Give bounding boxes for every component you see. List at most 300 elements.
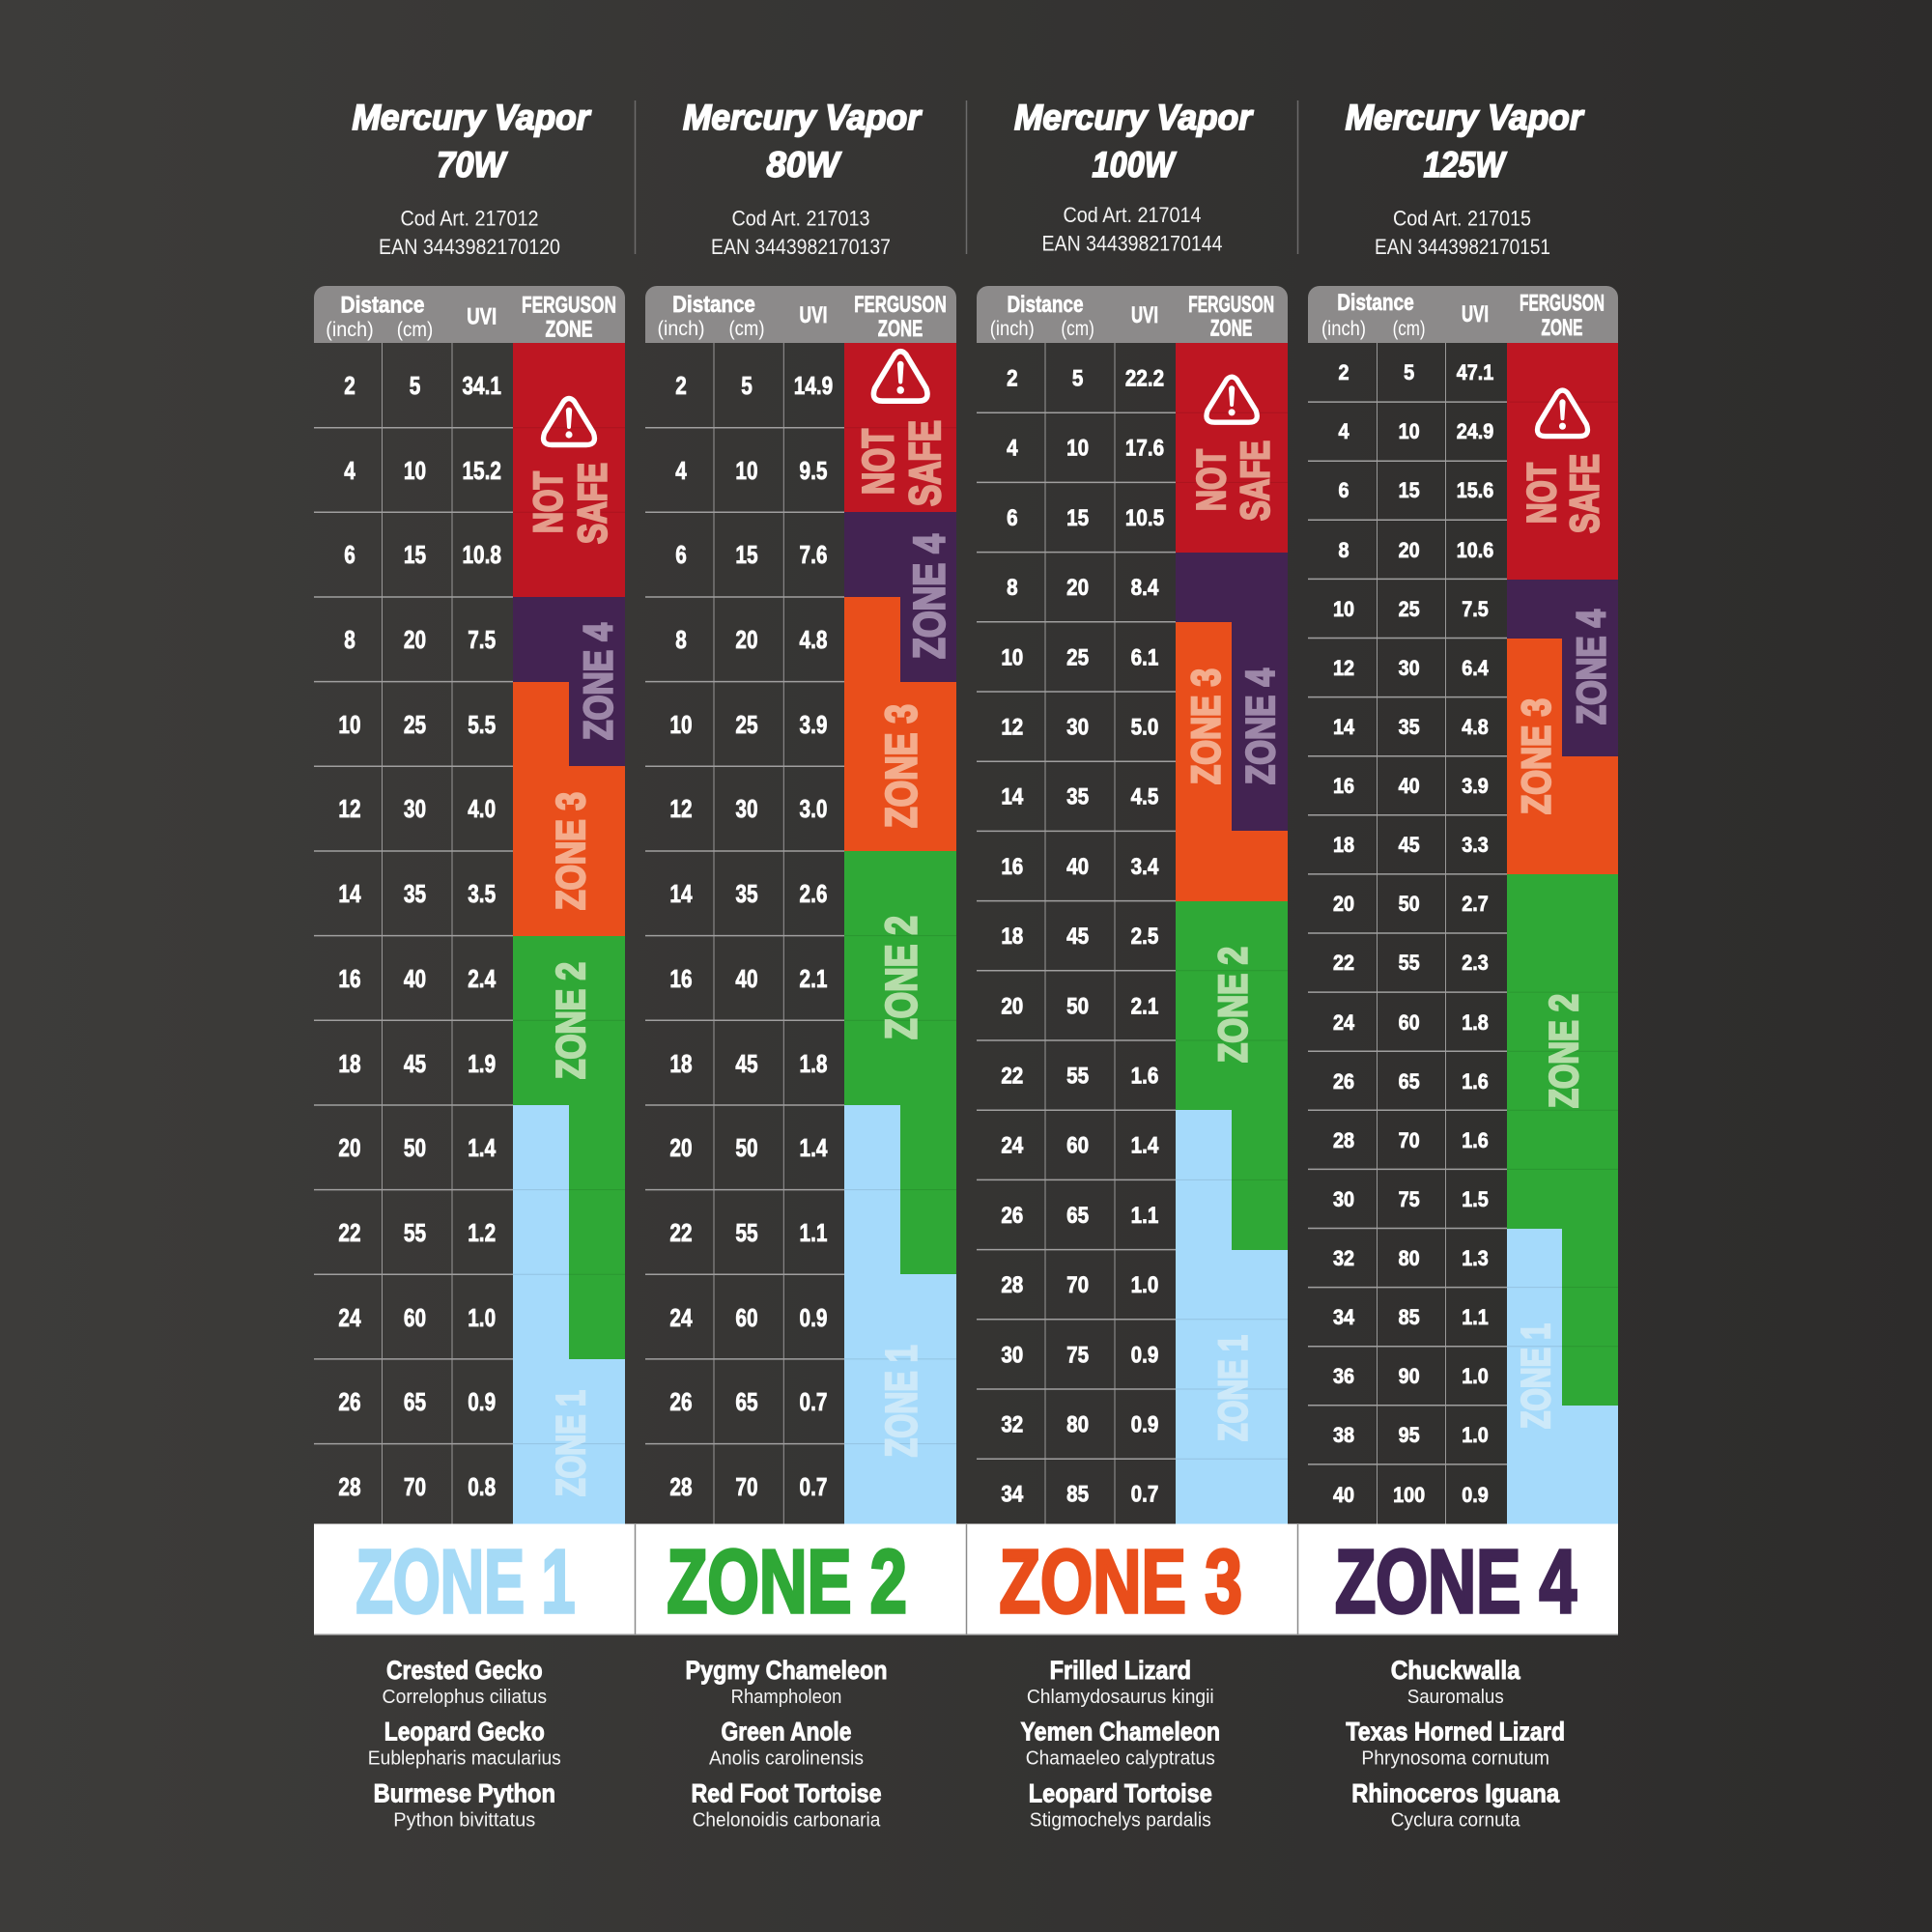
ferguson zones 125W: SAFE	[1562, 454, 1607, 533]
species list zone 2: Anolis carolinensis	[709, 1747, 864, 1770]
cm column 70W: 5	[410, 372, 420, 400]
cm column 100W: 15	[1066, 504, 1089, 530]
cm column 125W: 50	[1399, 893, 1420, 916]
UVI column 70W	[462, 372, 501, 1501]
cm column 100W: 35	[1066, 783, 1089, 810]
ferguson zones 70W	[513, 343, 625, 1524]
cm column 80W: 30	[735, 795, 758, 823]
cm column 70W: 60	[404, 1304, 426, 1332]
UVI column 125W: 15.6	[1457, 479, 1493, 502]
UVI column 80W: 14.9	[794, 372, 833, 400]
inch column 70W: 10	[338, 711, 361, 739]
ferguson zones 125W	[1507, 343, 1618, 1524]
cm column 70W: 10	[404, 457, 426, 485]
cm column 70W: 55	[404, 1219, 426, 1247]
banner label: zone 1: ZONE 1	[355, 1531, 576, 1632]
UVI column 100W: 5.0	[1131, 714, 1158, 740]
panel: table 80W	[645, 286, 956, 1524]
UVI column 80W: 7.6	[800, 541, 827, 569]
lamp heading: Mercury Vapor 80W	[683, 98, 923, 259]
cm column 80W	[735, 372, 758, 1501]
cm column 100W: 45	[1066, 923, 1089, 949]
inch column 80W: 28	[669, 1473, 693, 1501]
inch column 70W	[338, 372, 361, 1501]
ferguson zones 125W: NOT	[1519, 463, 1564, 524]
UVI column 125W: 2.3	[1462, 952, 1489, 975]
table header 80W: UVI	[800, 302, 827, 328]
cm column 125W: 100	[1393, 1484, 1425, 1507]
ferguson zones 100W	[1176, 343, 1288, 1524]
inch column 100W: 4	[1007, 435, 1018, 461]
UVI column 100W: 0.7	[1131, 1481, 1158, 1507]
lamp heading: Mercury Vapor 125W: 125W	[1424, 145, 1507, 185]
species list zone 1: Crested Gecko	[386, 1656, 543, 1685]
table header 70W: ZONE	[545, 317, 593, 342]
lamp heading: Mercury Vapor 100W: Cod Art. 217014	[1063, 203, 1202, 227]
cm column 70W: 40	[404, 965, 426, 993]
cm column 80W: 35	[735, 880, 758, 908]
table header 100W: (cm)	[1061, 318, 1094, 340]
UVI column 125W: 1.1	[1462, 1306, 1489, 1329]
species list zone 4: Phrynosoma cornutum	[1361, 1747, 1549, 1770]
UVI column 125W: 1.5	[1462, 1188, 1489, 1211]
cm column 80W: 65	[735, 1388, 758, 1416]
table header 70W: (cm)	[397, 319, 433, 341]
inch column 100W: 2	[1007, 365, 1018, 391]
inch column 125W: 20	[1333, 893, 1354, 916]
inch column 70W: 28	[338, 1473, 361, 1501]
lamp heading: Mercury Vapor 70W: 70W	[437, 145, 508, 185]
species list zone 2: Rhampholeon	[731, 1686, 841, 1708]
species list zone 1: Eublepharis macularius	[368, 1747, 561, 1770]
species list zone 3: Leopard Tortoise	[1029, 1779, 1212, 1808]
inch column 70W: 18	[338, 1050, 361, 1078]
icon: warning triangle 70W	[544, 398, 594, 444]
table header 125W: (inch)	[1321, 318, 1366, 340]
table header 80W: ZONE	[878, 316, 923, 342]
inch column 125W: 26	[1333, 1070, 1354, 1094]
cm column 80W: 60	[735, 1304, 758, 1332]
cm column 100W: 40	[1066, 853, 1089, 879]
species list zone 1: Correlophus ciliatus	[383, 1686, 547, 1708]
cm column 80W: 20	[735, 626, 758, 654]
table header 80W	[645, 286, 956, 343]
inch column 80W	[669, 372, 693, 1501]
lamp heading: Mercury Vapor 125W: EAN 3443982170151	[1375, 235, 1550, 259]
cm column 100W: 65	[1066, 1202, 1089, 1228]
UVI column 70W: 3.5	[468, 880, 496, 908]
ferguson zones 80W: SAFE	[900, 420, 950, 506]
ferguson zones 80W: ZONE 3	[876, 704, 925, 828]
inch column 70W: 14	[338, 880, 361, 908]
species list zone 4	[1346, 1656, 1565, 1832]
UVI column 125W: 6.4	[1462, 657, 1489, 680]
inch column 125W: 22	[1333, 952, 1354, 975]
table header 125W: (cm)	[1393, 318, 1426, 340]
UVI column 70W: 0.9	[468, 1388, 496, 1416]
inch column 100W: 22	[1001, 1063, 1023, 1089]
inch column 100W: 16	[1001, 853, 1023, 879]
cm column 70W: 15	[404, 541, 426, 569]
inch column 100W: 28	[1001, 1272, 1023, 1297]
UVI column 80W	[794, 372, 833, 1501]
cm column 125W: 90	[1399, 1365, 1420, 1388]
cm column 80W: 45	[735, 1050, 758, 1078]
cm column 125W: 45	[1399, 834, 1420, 857]
table header 70W: Distance	[340, 292, 425, 319]
species list zone 4: Cyclura cornuta	[1391, 1809, 1520, 1832]
cm column 80W: 55	[735, 1219, 758, 1247]
inch column 100W: 34	[1001, 1481, 1024, 1507]
cm column 80W: 70	[735, 1473, 758, 1501]
cm column 125W	[1393, 361, 1425, 1507]
UVI column 125W: 1.0	[1462, 1424, 1489, 1447]
lamp heading: Mercury Vapor 80W: 80W	[767, 145, 842, 185]
UVI column 125W: 1.6	[1462, 1129, 1489, 1152]
cm column 125W: 20	[1399, 539, 1420, 562]
inch column 70W: 2	[344, 372, 355, 400]
inch column 125W	[1333, 361, 1354, 1507]
ferguson zones 80W: ZONE 1	[876, 1345, 925, 1457]
UVI column 80W: 0.7	[800, 1388, 827, 1416]
inch column 100W: 8	[1007, 575, 1018, 600]
UVI column 70W: 2.4	[468, 965, 496, 993]
lamp heading: Mercury Vapor 70W: Cod Art. 217012	[400, 207, 539, 231]
UVI column 100W: 8.4	[1131, 575, 1159, 600]
UVI column 125W	[1457, 361, 1494, 1507]
table header 125W	[1308, 286, 1618, 343]
ferguson zones 80W: ZONE 2	[876, 916, 925, 1039]
ferguson zones 100W: ZONE 2	[1210, 947, 1256, 1063]
cm column 125W: 30	[1399, 657, 1420, 680]
ferguson zones 125W: ZONE 4	[1568, 610, 1613, 724]
table header 80W: (inch)	[657, 318, 705, 340]
ferguson zones 125W: ZONE 3	[1514, 698, 1559, 814]
inch column 125W: 24	[1333, 1011, 1354, 1035]
inch column 125W: 34	[1333, 1306, 1354, 1329]
UVI column 70W: 4.0	[468, 795, 496, 823]
table header 100W: (inch)	[990, 318, 1035, 340]
inch column 125W: 38	[1333, 1424, 1354, 1447]
UVI column 80W: 3.0	[800, 795, 827, 823]
table header 100W: FERGUSON	[1188, 292, 1274, 318]
table header 100W	[977, 286, 1288, 343]
lamp heading: Mercury Vapor 100W: 100W	[1092, 145, 1177, 185]
UVI column 80W: 9.5	[800, 457, 827, 485]
lamp heading: Mercury Vapor 80W: EAN 3443982170137	[711, 235, 891, 259]
UVI column 125W: 3.9	[1462, 775, 1489, 798]
grid lines 100W	[977, 343, 1176, 1524]
cm column 70W	[404, 372, 426, 1501]
species list zone 1: Leopard Gecko	[384, 1718, 545, 1747]
cm column 100W: 55	[1066, 1063, 1089, 1089]
table header 125W: FERGUSON	[1520, 290, 1605, 317]
UVI column 100W: 1.1	[1131, 1202, 1158, 1228]
UVI column 125W: 1.6	[1462, 1070, 1489, 1094]
cm column 125W: 5	[1404, 361, 1414, 384]
cm column 100W: 75	[1066, 1342, 1089, 1368]
cm column 70W: 20	[404, 626, 426, 654]
inch column 70W: 24	[338, 1304, 361, 1332]
inch column 80W: 8	[675, 626, 687, 654]
cm column 100W: 5	[1072, 365, 1083, 391]
inch column 80W: 6	[675, 541, 687, 569]
UVI column 100W: 6.1	[1131, 644, 1158, 670]
cm column 125W: 55	[1399, 952, 1420, 975]
UVI column 70W: 1.4	[468, 1134, 496, 1162]
lamp heading: Mercury Vapor 80W: Mercury Vapor	[683, 98, 923, 137]
banner label: zone 2: ZONE 2	[667, 1531, 907, 1632]
cm column 125W: 35	[1399, 716, 1420, 739]
UVI column 125W: 7.5	[1462, 598, 1489, 621]
inch column 100W: 12	[1001, 714, 1023, 740]
UVI column 125W: 2.7	[1462, 893, 1489, 916]
ferguson zones 70W: SAFE	[570, 463, 615, 544]
cm column 125W: 65	[1399, 1070, 1420, 1094]
ferguson zones 70W: ZONE 4	[575, 622, 620, 740]
ferguson zones 70W: ZONE 2	[548, 962, 593, 1079]
ferguson zones 80W: NOT	[854, 429, 903, 495]
species list zone 2	[686, 1656, 887, 1832]
species list zone 3: Frilled Lizard	[1050, 1656, 1191, 1685]
table header 70W	[314, 286, 625, 343]
grid lines 80W	[645, 343, 844, 1524]
ferguson zones 100W: NOT	[1188, 449, 1234, 511]
ferguson zones 80W: ZONE 4	[904, 534, 953, 659]
inch column 125W: 32	[1333, 1247, 1354, 1270]
species list zone 1: Burmese Python	[374, 1779, 555, 1808]
cm column 70W: 25	[404, 711, 426, 739]
UVI column 80W: 3.9	[800, 711, 827, 739]
UVI column 125W: 1.8	[1462, 1011, 1489, 1035]
cm column 80W: 10	[735, 457, 758, 485]
cm column 100W: 85	[1066, 1481, 1089, 1507]
inch column 70W: 22	[338, 1219, 361, 1247]
UVI column 100W: 0.9	[1131, 1342, 1158, 1368]
species list zone 3: Chlamydosaurus kingii	[1027, 1686, 1214, 1708]
icon: warning triangle 80W	[873, 352, 927, 401]
cm column 100W: 10	[1066, 435, 1089, 461]
banner label: zone 4: ZONE 4	[1335, 1531, 1577, 1632]
lamp heading: Mercury Vapor 70W: Mercury Vapor	[352, 98, 592, 137]
species list zone 4: Sauromalus	[1407, 1686, 1504, 1708]
inch column 100W: 24	[1001, 1132, 1024, 1158]
UVI column 70W: 34.1	[462, 372, 501, 400]
column dividers in title area	[636, 100, 1298, 254]
cm column 80W: 5	[741, 372, 753, 400]
cm column 100W: 30	[1066, 714, 1089, 740]
lamp heading: Mercury Vapor 70W: EAN 3443982170120	[379, 235, 560, 259]
UVI column 125W: 24.9	[1457, 420, 1493, 443]
species list zone 3: Chamaeleo calyptratus	[1026, 1747, 1215, 1770]
species list zone 2: Pygmy Chameleon	[686, 1656, 887, 1685]
species list zone 1: Python bivittatus	[393, 1809, 535, 1832]
inch column 125W: 10	[1333, 598, 1354, 621]
UVI column 70W: 5.5	[468, 711, 496, 739]
table header 125W: UVI	[1462, 301, 1489, 327]
table header 70W: FERGUSON	[522, 292, 616, 319]
UVI column 80W: 1.8	[800, 1050, 827, 1078]
UVI column 80W: 1.1	[800, 1219, 827, 1247]
species list zone 2: Red Foot Tortoise	[692, 1779, 881, 1808]
cm column 125W: 60	[1399, 1011, 1420, 1035]
inch column 125W: 6	[1338, 479, 1350, 502]
cm column 125W: 70	[1399, 1129, 1420, 1152]
inch column 125W: 36	[1333, 1365, 1354, 1388]
table header 70W: UVI	[467, 303, 497, 330]
species list zone 4: Chuckwalla	[1391, 1656, 1521, 1685]
inch column 100W: 18	[1001, 923, 1023, 949]
cm column 125W: 85	[1399, 1306, 1420, 1329]
cm column 70W: 50	[404, 1134, 426, 1162]
inch column 125W: 12	[1333, 657, 1354, 680]
ferguson zones 70W: NOT	[526, 471, 571, 533]
UVI column 125W: 0.9	[1462, 1484, 1489, 1507]
banner label: zone 3: ZONE 3	[999, 1531, 1242, 1632]
UVI column 100W	[1125, 365, 1164, 1507]
cm column 100W: 50	[1066, 993, 1089, 1019]
icon: warning triangle 125W	[1537, 390, 1587, 437]
cm column 125W: 10	[1399, 420, 1420, 443]
lamp heading: Mercury Vapor 100W: Mercury Vapor	[1014, 98, 1254, 137]
inch column 100W: 26	[1001, 1202, 1023, 1228]
UVI column 100W: 10.5	[1125, 504, 1164, 530]
inch column 80W: 2	[675, 372, 687, 400]
ferguson zones 125W: ZONE 1	[1513, 1323, 1558, 1429]
table header 80W: (cm)	[728, 318, 765, 340]
UVI column 80W: 4.8	[800, 626, 827, 654]
UVI column 125W: 1.3	[1462, 1247, 1489, 1270]
icon: warning triangle 100W	[1207, 377, 1257, 422]
lamp heading: Mercury Vapor 125W: Cod Art. 217015	[1393, 207, 1531, 231]
UVI column 125W: 3.3	[1462, 834, 1489, 857]
ferguson zones 100W: ZONE 3	[1182, 668, 1228, 784]
cm column 125W: 25	[1399, 598, 1420, 621]
UVI column 70W: 15.2	[462, 457, 501, 485]
inch column 80W: 26	[669, 1388, 693, 1416]
cm column 80W: 15	[735, 541, 758, 569]
species list zone 1	[368, 1656, 561, 1832]
inch column 80W: 16	[669, 965, 693, 993]
inch column 100W: 20	[1001, 993, 1023, 1019]
cm column 100W	[1066, 365, 1089, 1507]
inch column 70W: 20	[338, 1134, 361, 1162]
UVI column 100W: 1.4	[1131, 1132, 1159, 1158]
UVI column 100W: 1.6	[1131, 1063, 1158, 1089]
grid lines 125W	[1308, 343, 1507, 1524]
UVI column 70W: 1.9	[468, 1050, 496, 1078]
ferguson zones 125W: ZONE 2	[1541, 994, 1586, 1108]
cm column 80W: 25	[735, 711, 758, 739]
inch column 125W: 40	[1333, 1484, 1354, 1507]
UVI column 80W: 0.9	[800, 1304, 827, 1332]
UVI column 70W: 1.2	[468, 1219, 496, 1247]
inch column 70W: 26	[338, 1388, 361, 1416]
panel: table 100W	[977, 286, 1288, 1524]
cm column 70W: 45	[404, 1050, 426, 1078]
inch column 125W: 16	[1333, 775, 1354, 798]
lamp heading: Mercury Vapor 100W	[1014, 98, 1254, 255]
inch column 80W: 4	[675, 457, 687, 485]
cm column 100W: 70	[1066, 1272, 1089, 1297]
inch column 100W: 14	[1001, 783, 1024, 810]
UVI column 100W: 17.6	[1125, 435, 1164, 461]
UVI column 125W: 47.1	[1457, 361, 1494, 384]
inch column 100W: 30	[1001, 1342, 1023, 1368]
inch column 100W: 32	[1001, 1411, 1023, 1437]
species list zone 3: Yemen Chameleon	[1020, 1718, 1220, 1747]
lamp heading: Mercury Vapor 70W	[352, 98, 592, 259]
inch column 80W: 12	[669, 795, 693, 823]
cm column 100W: 20	[1066, 575, 1089, 600]
table header 125W: Distance	[1337, 290, 1414, 316]
inch column 125W: 8	[1338, 539, 1350, 562]
cm column 80W: 50	[735, 1134, 758, 1162]
UVI column 70W: 10.8	[462, 541, 501, 569]
UVI column 100W: 3.4	[1131, 853, 1159, 879]
inch column 125W: 30	[1333, 1188, 1354, 1211]
cm column 100W: 25	[1066, 644, 1089, 670]
cm column 125W: 40	[1399, 775, 1420, 798]
cm column 80W: 40	[735, 965, 758, 993]
UVI column 100W: 4.5	[1131, 783, 1158, 810]
UVI column 100W: 1.0	[1131, 1272, 1158, 1297]
UVI column 125W: 1.0	[1462, 1365, 1489, 1388]
cm column 100W: 80	[1066, 1411, 1089, 1437]
ferguson zones 70W: ZONE 1	[548, 1390, 593, 1496]
UVI column 100W: 2.5	[1131, 923, 1158, 949]
UVI column 80W: 1.4	[800, 1134, 827, 1162]
inch column 80W: 24	[669, 1304, 693, 1332]
inch column 70W: 6	[344, 541, 355, 569]
inch column 100W	[1001, 365, 1024, 1507]
panel: white zone banner	[314, 1524, 1618, 1634]
ferguson zones 70W: ZONE 3	[548, 792, 593, 910]
table header 100W: ZONE	[1210, 315, 1252, 342]
table header 100W: UVI	[1131, 302, 1158, 328]
lamp heading: Mercury Vapor 100W: EAN 3443982170144	[1041, 231, 1223, 255]
species list zone 2: Green Anole	[721, 1718, 852, 1747]
panel: table 70W	[314, 286, 625, 1524]
table header 80W: FERGUSON	[854, 292, 947, 318]
cm column 125W: 95	[1399, 1424, 1420, 1447]
cm column 70W: 35	[404, 880, 426, 908]
inch column 80W: 18	[669, 1050, 693, 1078]
inch column 70W: 8	[344, 626, 355, 654]
lamp heading: Mercury Vapor 125W	[1346, 98, 1585, 259]
UVI column 125W: 10.6	[1457, 539, 1493, 562]
inch column 125W: 14	[1333, 716, 1354, 739]
inch column 80W: 20	[669, 1134, 693, 1162]
UVI column 100W: 0.9	[1131, 1411, 1158, 1437]
UVI column 70W: 1.0	[468, 1304, 496, 1332]
cm column 100W: 60	[1066, 1132, 1089, 1158]
species list zone 2: Chelonoidis carbonaria	[693, 1809, 881, 1832]
ferguson zones 100W: ZONE 1	[1210, 1335, 1256, 1441]
lamp heading: Mercury Vapor 125W: Mercury Vapor	[1346, 98, 1585, 137]
UVI column 80W: 2.6	[800, 880, 827, 908]
lamp heading: Mercury Vapor 80W: Cod Art. 217013	[732, 207, 869, 231]
inch column 80W: 14	[669, 880, 693, 908]
table header 100W: Distance	[1007, 292, 1084, 318]
table header 80W: Distance	[672, 292, 755, 318]
inch column 125W: 18	[1333, 834, 1354, 857]
inch column 70W: 12	[338, 795, 361, 823]
inch column 125W: 2	[1338, 361, 1350, 384]
table header 125W: ZONE	[1542, 315, 1582, 341]
table header 70W: (inch)	[326, 319, 374, 341]
UVI column 125W: 4.8	[1462, 716, 1489, 739]
